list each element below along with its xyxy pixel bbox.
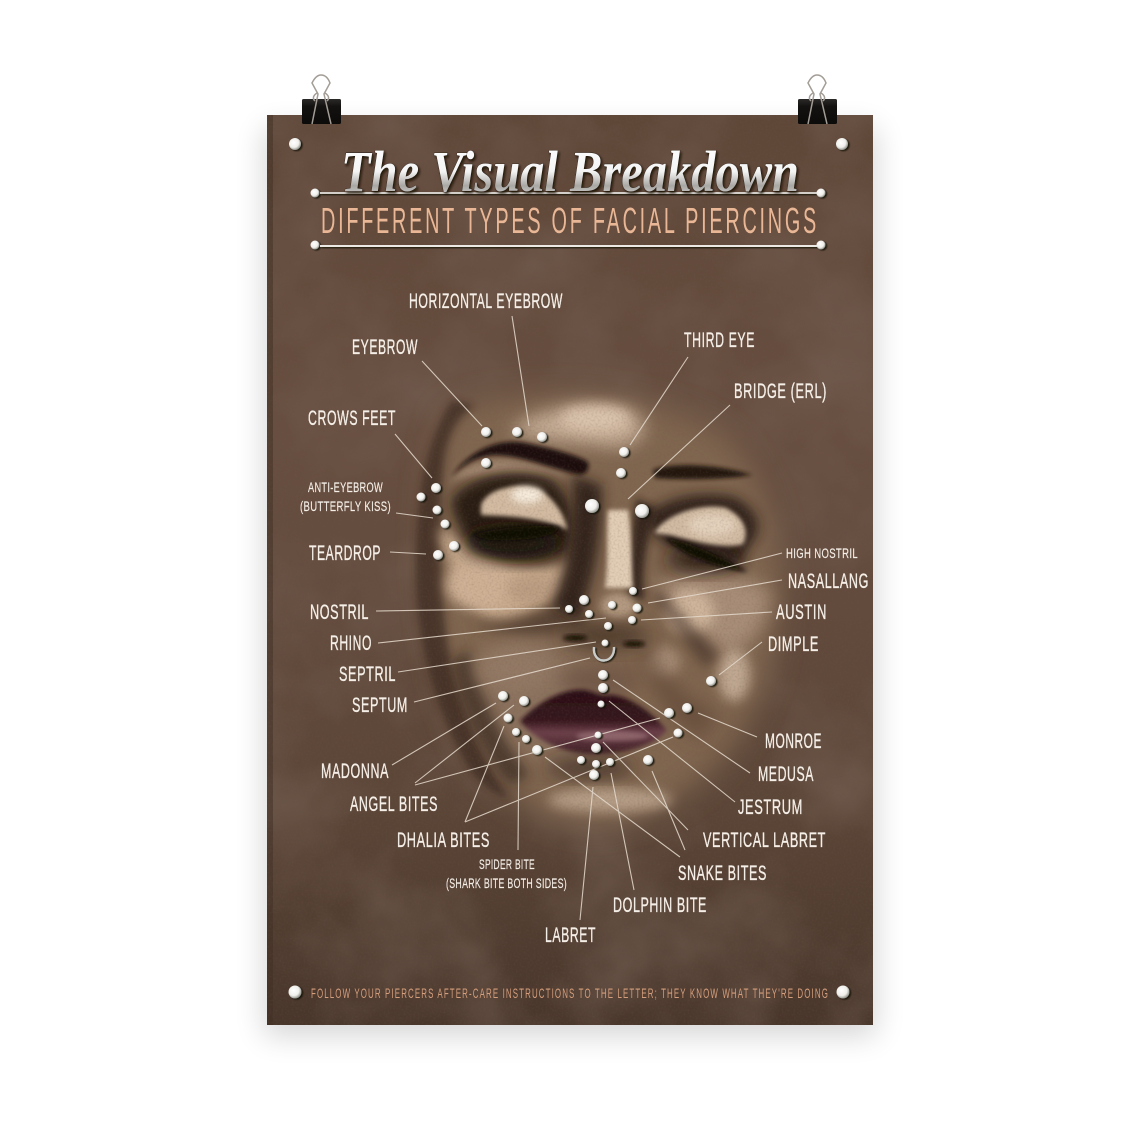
label: labret: LABRET [545,924,596,947]
label: anti-eyebrow: (BUTTERFLY KISS) [300,499,391,514]
label: spider bite: SPIDER BITE [479,857,535,872]
outer hair band [416,400,510,800]
binder clip left [302,75,341,124]
septum ring [594,647,614,660]
label: anti-eyebrow: ANTI-EYEBROW [308,480,383,495]
label: medusa: MEDUSA [758,763,814,786]
face painting [416,395,779,825]
label: anti-eyebrow [300,480,391,514]
right eyelid [654,507,746,546]
label: septum: SEPTUM [352,694,408,717]
label: dolphin bite: DOLPHIN BITE [613,894,707,917]
lips [520,690,667,754]
right eye socket [646,494,758,566]
piercing studs [416,427,716,780]
label: nostril: NOSTRIL [310,601,369,624]
nose base [561,623,649,649]
leader lines [376,316,782,920]
label: teardrop: TEARDROP [309,542,381,565]
chin light [548,788,672,812]
label: monroe: MONROE [765,730,822,753]
right eyelash [665,538,748,572]
label: eyebrow: EYEBROW [352,336,418,359]
label: angel bites: ANGEL BITES [350,793,438,816]
poster panel [267,115,873,1025]
right eyebrow [653,465,752,479]
right cheek diagonal shadow [648,590,720,668]
base skin [427,395,779,825]
label: spider bite: (SHARK BITE BOTH SIDES) [446,876,567,891]
right cheek lights [650,575,770,652]
lower left cheek shadow [480,599,590,640]
left eye socket [452,473,572,560]
label: high nostril: HIGH NOSTRIL [786,546,858,561]
labels [300,290,869,947]
forehead light [510,405,644,447]
nose highlight [605,510,633,588]
left cheek [438,530,572,619]
label: horizontal eyebrow: HORIZONTAL EYEBROW [409,290,563,313]
label: rhino: RHINO [330,632,372,655]
label: spider bite [446,857,567,891]
upper-lip area [561,664,632,693]
left eyelid [481,486,568,530]
nostrils [563,635,587,641]
under-lip shadow [546,759,634,777]
poster drop shadow [264,128,876,1036]
title rules [310,188,826,250]
title: The Visual Breakdown [341,139,799,204]
label: crows feet: CROWS FEET [308,407,396,430]
label: snake bites: SNAKE BITES [678,862,767,885]
left eyebrow [450,442,589,478]
label: dhalia bites: DHALIA BITES [397,829,490,852]
label: bridge: BRIDGE (ERL) [734,380,827,403]
label: austin: AUSTIN [776,601,827,624]
nose side shadows [552,475,602,618]
label: vertical labret: VERTICAL LABRET [703,829,826,852]
binder clip right [798,75,837,124]
label: third eye: THIRD EYE [684,329,755,352]
label: septril: SEPTRIL [339,663,396,686]
label: madonna: MADONNA [321,760,389,783]
label: jestrum: JESTRUM [738,796,803,819]
left eyelash [470,526,560,540]
corner pins [288,138,850,998]
label: dimple: DIMPLE [768,633,819,656]
label: nasallang: NASALLANG [788,570,869,593]
left brow lid [450,461,570,480]
mid-lower face [475,644,555,692]
paper grain [444,402,763,811]
